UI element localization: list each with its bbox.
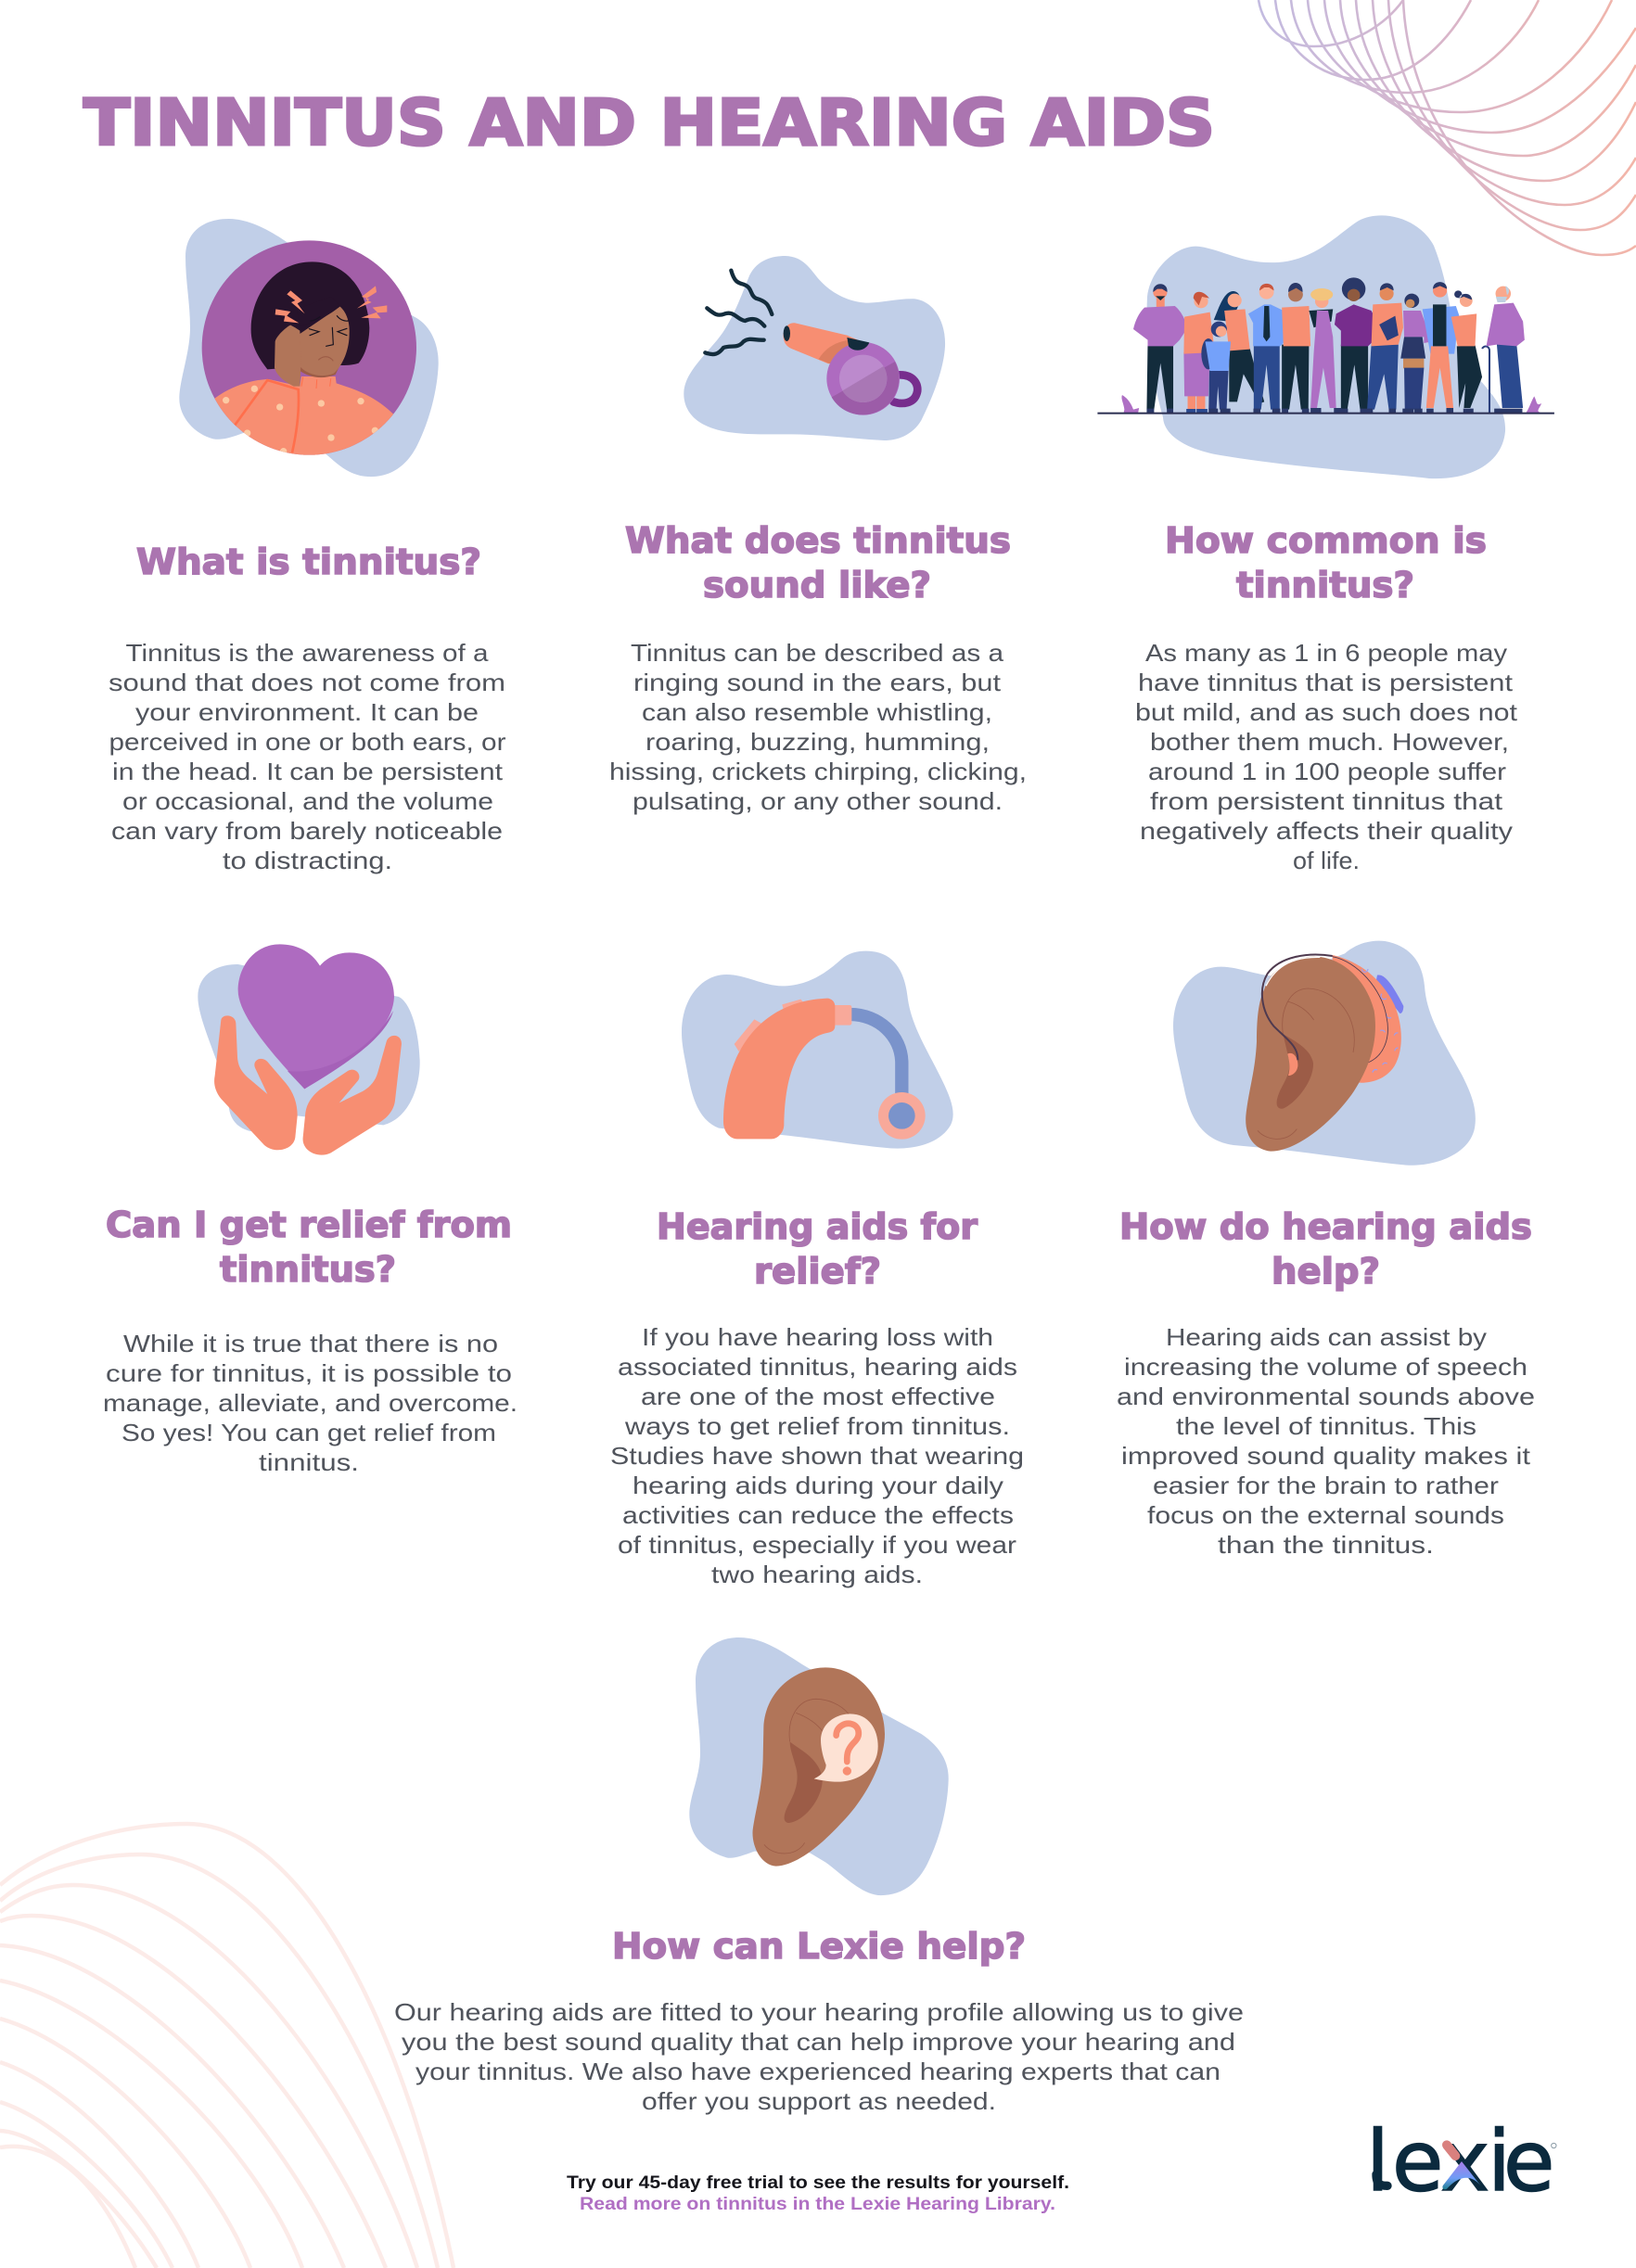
icon: ear with question speech bubble — [689, 1637, 949, 1895]
person 2 — [1183, 292, 1215, 413]
footer call to action: Read more on tinnitus in the Lexie Hearing Library. — [580, 2195, 1055, 2214]
footer call to action: Try our 45-day free trial to see the results for yourself. — [567, 2173, 1069, 2193]
panel: hearing aids for relief — [610, 951, 1024, 1588]
body text: Tinnitus is the awareness of a — [126, 639, 489, 667]
person 10 — [1400, 294, 1432, 410]
person 12 — [1451, 290, 1482, 408]
body text: in the head. It can be persistent — [112, 758, 504, 785]
body text: ways to get relief from tinnitus. — [624, 1412, 1010, 1440]
body text: activities can reduce the effects — [622, 1501, 1014, 1529]
body text — [1135, 639, 1518, 874]
heading: How do hearing aids — [1119, 1206, 1532, 1247]
body text: can vary from barely noticeable — [111, 817, 503, 845]
body text: hissing, crickets chirping, clicking, — [609, 758, 1027, 785]
heading — [106, 1204, 512, 1290]
icon: whistle with sound waves — [684, 256, 945, 440]
heading — [657, 1206, 978, 1292]
body text: hearing aids during your daily — [633, 1472, 1003, 1499]
body text: perceived in one or both ears, or — [109, 728, 506, 756]
heading — [1165, 520, 1487, 605]
body text — [610, 1323, 1024, 1588]
person 11 — [1423, 282, 1459, 408]
heading: How can Lexie help? — [612, 1926, 1026, 1967]
heading: What does tinnitus — [625, 520, 1011, 561]
body text: your environment. It can be — [135, 698, 479, 726]
body text: As many as 1 in 6 people may — [1145, 639, 1507, 667]
body text — [109, 639, 506, 874]
body text — [609, 639, 1027, 815]
heading: help? — [1272, 1251, 1380, 1292]
cane — [1482, 347, 1489, 413]
person 13 — [1487, 286, 1525, 408]
footer call to action — [567, 2173, 1069, 2214]
body text — [1117, 1323, 1535, 1559]
body text: or occasional, and the volume — [122, 787, 493, 815]
heading: sound like? — [703, 565, 931, 605]
person 4 — [1214, 291, 1264, 403]
body text: of life. — [1293, 847, 1360, 874]
icon: ear wearing a hearing aid — [1173, 941, 1476, 1166]
body text: Our hearing aids are fitted to your hearing profile allowing us to give — [394, 1998, 1244, 2026]
heading: tinnitus? — [220, 1249, 396, 1290]
body text: ringing sound in the ears, but — [633, 669, 1002, 696]
icon: blob behind group of people — [1147, 215, 1505, 478]
body text: offer you support as needed. — [642, 2087, 996, 2115]
panel: how common is tinnitus — [1097, 215, 1554, 874]
body text: pulsating, or any other sound. — [633, 787, 1003, 815]
body text: negatively affects their quality — [1140, 817, 1513, 845]
heading: relief? — [754, 1251, 881, 1292]
body text: but mild, and as such does not — [1135, 698, 1518, 726]
body text: While it is true that there is no — [123, 1330, 498, 1357]
body text: to distracting. — [223, 847, 392, 874]
body text: So yes! You can get relief from — [121, 1419, 496, 1446]
body text: are one of the most effective — [641, 1382, 995, 1410]
panel: what is tinnitus — [109, 219, 506, 874]
body text: have tinnitus that is persistent — [1138, 669, 1514, 696]
person 7 — [1309, 288, 1336, 408]
heading: What is tinnitus? — [136, 542, 481, 582]
heading: Can I get relief from — [106, 1204, 512, 1245]
body text — [394, 1998, 1244, 2115]
body text: associated tinnitus, hearing aids — [618, 1353, 1017, 1381]
body text: around 1 in 100 people suffer — [1148, 758, 1506, 785]
title: TINNITUS AND HEARING AIDS — [83, 86, 1215, 160]
icon: hands holding a heart — [198, 944, 420, 1155]
heading — [625, 520, 1011, 605]
person 8 — [1335, 277, 1383, 410]
person 9 — [1367, 283, 1403, 410]
body text: bother them much. However, — [1150, 728, 1509, 756]
person 3: child with backpack — [1201, 322, 1231, 410]
body text: easier for the brain to rather — [1153, 1472, 1499, 1499]
body text: of tinnitus, especially if you wear — [618, 1531, 1016, 1559]
person 5 — [1248, 284, 1295, 410]
logo: lexie: lexie — [1366, 2113, 1554, 2211]
body text: Hearing aids can assist by — [1166, 1323, 1487, 1351]
body text: than the tinnitus. — [1218, 1531, 1434, 1559]
body text: you the best sound quality that can help improve your hearing and — [402, 2028, 1235, 2056]
heading: Hearing aids for — [657, 1206, 978, 1247]
body text: and environmental sounds above — [1117, 1382, 1535, 1410]
panel: can I get relief — [103, 944, 518, 1476]
body text — [103, 1330, 518, 1476]
body text: tinnitus. — [259, 1448, 359, 1476]
body text: your tinnitus. We also have experienced hearing experts that can — [415, 2058, 1221, 2085]
body text: cure for tinnitus, it is possible to — [106, 1359, 512, 1387]
heading — [1119, 1206, 1532, 1292]
panel: how can Lexie help — [394, 1637, 1244, 2115]
person 6 — [1282, 283, 1310, 410]
body text: increasing the volume of speech — [1124, 1353, 1527, 1381]
body text: the level of tinnitus. This — [1176, 1412, 1476, 1440]
body text: sound that does not come from — [109, 669, 505, 696]
body text: focus on the external sounds — [1147, 1501, 1504, 1529]
heading: How common is — [1165, 520, 1487, 561]
icon: group of diverse people — [1097, 277, 1554, 414]
shoes and ground — [1146, 408, 1522, 413]
body text: two hearing aids. — [711, 1561, 923, 1588]
body text: Tinnitus can be described as a — [631, 639, 1004, 667]
body text: manage, alleviate, and overcome. — [103, 1389, 518, 1417]
body text: If you have hearing loss with — [642, 1323, 993, 1351]
panel: how do hearing aids help — [1117, 941, 1535, 1559]
body text: improved sound quality makes it — [1121, 1442, 1531, 1470]
icon: woman holding her head with lightning bolts — [179, 219, 439, 477]
icon: behind-the-ear hearing aid — [682, 951, 953, 1149]
body text: can also resemble whistling, — [642, 698, 992, 726]
decorative waves: top right — [1259, 0, 1636, 255]
person 1 — [1133, 284, 1188, 410]
decorative waves: bottom left — [0, 1824, 454, 2268]
heading: tinnitus? — [1236, 565, 1414, 605]
body text: Studies have shown that wearing — [610, 1442, 1024, 1470]
body text: roaring, buzzing, humming, — [645, 728, 990, 756]
panel: what does tinnitus sound like — [609, 256, 1027, 815]
body text: from persistent tinnitus that — [1150, 787, 1503, 815]
